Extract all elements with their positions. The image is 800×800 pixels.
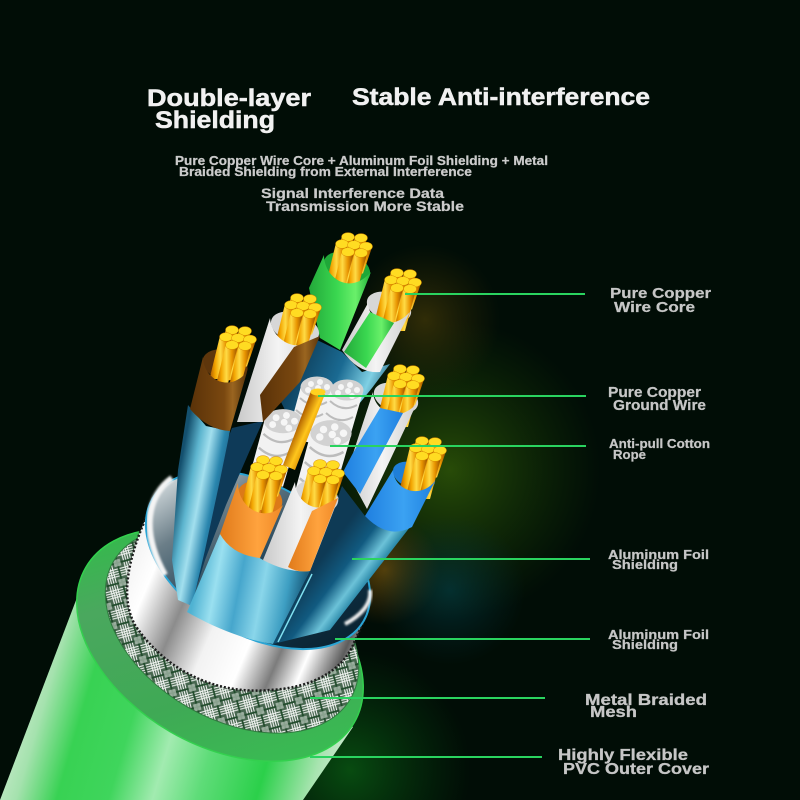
label: highly flexible pvc outer cover — [558, 747, 709, 778]
label: pure copper wire core: Pure Copper — [610, 286, 711, 302]
jacket end ring — [36, 481, 404, 800]
pure copper ground wire — [283, 388, 326, 470]
white and brown wire — [237, 294, 324, 422]
title: stable anti-interference: Stable Anti-interference — [352, 84, 650, 111]
subtitle: shielding description — [175, 154, 548, 179]
label: pure copper ground wire — [608, 385, 706, 414]
title: double-layer shielding: Shielding — [155, 107, 275, 134]
label: anti-pull cotton rope: Anti-pull Cotton — [609, 437, 710, 451]
label: aluminum foil shielding, inner: Aluminum Foil — [608, 548, 709, 562]
foil wrap around orange pair — [187, 534, 310, 644]
white and orange wire — [263, 460, 344, 572]
label: metal braided mesh — [585, 692, 707, 721]
label: aluminum foil shielding, inner — [608, 548, 709, 572]
foil wrap around blue pair — [273, 486, 410, 644]
label: pure copper wire core: Wire Core — [614, 300, 695, 316]
cable — [0, 233, 446, 800]
label: pure copper ground wire: Ground Wire — [613, 398, 706, 414]
label: highly flexible pvc outer cover: Highly Flexible — [558, 747, 688, 764]
solid green wire — [309, 233, 375, 350]
subtitle: signal description: Transmission More Stable — [266, 198, 464, 214]
subtitle: signal description: Signal Interference Data — [261, 185, 444, 201]
solid orange wire — [220, 456, 288, 558]
label: aluminum foil shielding, outer: Aluminum Foil — [608, 628, 709, 642]
label: metal braided mesh: Mesh — [590, 704, 637, 721]
label: metal braided mesh: Metal Braided — [585, 692, 707, 709]
solid blue wire — [365, 437, 446, 532]
foil wrap behind green pair — [280, 340, 390, 420]
label: anti-pull cotton rope: Rope — [613, 448, 646, 462]
subtitle: signal description — [261, 185, 464, 214]
label: pure copper ground wire: Pure Copper — [608, 385, 701, 401]
title: double-layer shielding — [147, 85, 311, 134]
label: anti-pull cotton rope — [609, 437, 710, 462]
white and green wire — [342, 269, 422, 372]
subtitle: shielding description: Braided Shielding from External Interference — [179, 165, 472, 179]
foil wrap around brown pair — [172, 405, 263, 608]
subtitle: shielding description: Pure Copper Wire Core + Aluminum Foil Shielding + Metal — [175, 154, 548, 168]
label: aluminum foil shielding, outer — [608, 628, 709, 652]
label: pure copper wire core — [610, 286, 711, 316]
metal braided mesh — [69, 484, 395, 776]
label: aluminum foil shielding, outer: Shielding — [612, 638, 678, 652]
silver aluminium foil band — [115, 434, 401, 691]
label: highly flexible pvc outer cover: PVC Outer Cover — [563, 761, 709, 778]
anti-pull cotton ropes — [248, 376, 364, 504]
leader lines — [310, 294, 590, 757]
solid brown wire — [190, 326, 256, 431]
label: aluminum foil shielding, inner: Shielding — [612, 558, 678, 572]
PVC outer cover — [0, 595, 353, 800]
title: double-layer shielding: Double-layer — [147, 85, 311, 112]
white and blue wire — [343, 365, 424, 509]
